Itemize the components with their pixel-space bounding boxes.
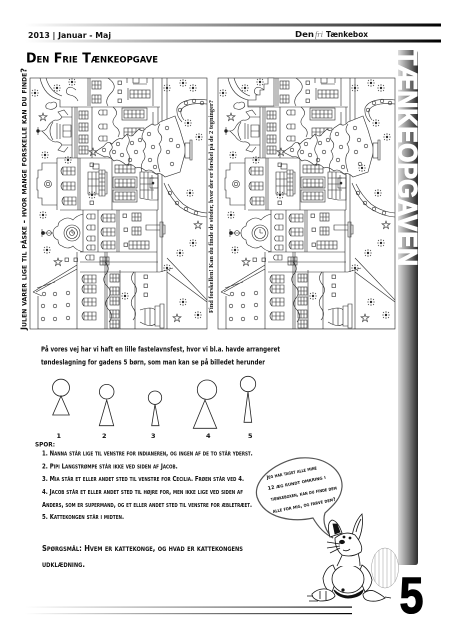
title: Den Frie Tænkeopgave xyxy=(26,50,158,66)
clues: 5. Kattekongen står i midten. xyxy=(42,513,124,521)
arms xyxy=(323,565,338,592)
icon: easter bunny xyxy=(307,514,398,601)
header publication name xyxy=(295,30,369,39)
header publication name: Den xyxy=(295,30,314,39)
tree ornament difference xyxy=(358,164,366,172)
feet xyxy=(312,589,335,601)
bubble text: tænkeboxen, kan du finde dem xyxy=(270,485,337,503)
bubble text: Jeg har taget alle mine xyxy=(265,465,318,481)
clues: 1. Nanna står lige til venstre for indianeren, og ingen af de to står yderst. xyxy=(42,450,253,458)
figure numbers xyxy=(56,432,253,440)
figure numbers: 3 xyxy=(151,432,156,440)
intro text: tøndeslagning for gadens 5 børn, som man kan se på billedet herunder xyxy=(41,358,266,366)
figure numbers: 1 xyxy=(56,432,62,440)
stepped gable difference xyxy=(248,78,274,106)
figure numbers: 5 xyxy=(248,432,253,440)
clues: 3. Mia står et eller andet sted til venstre for Cecilia. Frøen står ved 4. xyxy=(42,475,244,483)
figure 5 xyxy=(240,376,256,422)
right drawing xyxy=(218,78,395,329)
intro text: På vores vej har vi haft en lille fastelavnsfest, hvor vi bl.a. havde arrangeret xyxy=(41,344,281,354)
vertical heading left: Julen varer lige til påske - hvor mange forskelle kan du finde? xyxy=(20,68,28,331)
sidebar title: TÆNKEOPGAVEN xyxy=(392,50,422,266)
sidebar xyxy=(392,50,422,565)
clues: Anders, som er supermand, og et eller andet sted til venstre for æbletræet. xyxy=(42,501,252,509)
figure 4 xyxy=(193,380,217,428)
figure 1 xyxy=(52,379,70,415)
ears xyxy=(328,520,342,537)
left drawing xyxy=(30,78,207,329)
clues: 4. Jacob står et eller andet sted til højre for, men ikke lige ved siden af xyxy=(42,488,243,496)
bubble text xyxy=(265,465,337,515)
question: Spørgsmål: Hvem er kattekonge, og hvad er kattekongens xyxy=(42,544,243,553)
clues: SPOR: xyxy=(35,440,55,448)
question xyxy=(42,544,243,569)
question: udklædning. xyxy=(42,560,85,569)
header bar xyxy=(25,24,441,42)
egg xyxy=(372,548,398,588)
belly xyxy=(332,565,364,593)
figure numbers: 4 xyxy=(206,432,211,440)
intro text xyxy=(41,344,281,366)
figure 3 xyxy=(148,391,162,426)
stick figures xyxy=(52,376,256,428)
bubble text: 12 æg rundt omkring i xyxy=(267,475,327,492)
bubble text: alle for mig, og farve dem? xyxy=(272,497,336,515)
header date: 2013 | Januar - Maj xyxy=(28,31,111,40)
header publication name: Tænkebox xyxy=(326,30,369,39)
header publication name: fri xyxy=(315,30,323,39)
vertical caption: Find forskellen! Kan du finde de steder, hvor der er forskel på de 2 tegninger? xyxy=(208,100,215,313)
figure numbers: 2 xyxy=(102,432,107,440)
speech bubble xyxy=(256,458,342,538)
neck xyxy=(337,553,360,566)
figure 2 xyxy=(99,384,114,426)
head xyxy=(335,533,362,556)
clues xyxy=(35,440,253,521)
left drawing clock detail xyxy=(70,230,74,236)
clues: 2. Pipi Langstrømpe står ikke ved siden af Jacob. xyxy=(42,462,178,470)
page number: 5 xyxy=(400,567,424,624)
bottom rules xyxy=(25,606,352,614)
